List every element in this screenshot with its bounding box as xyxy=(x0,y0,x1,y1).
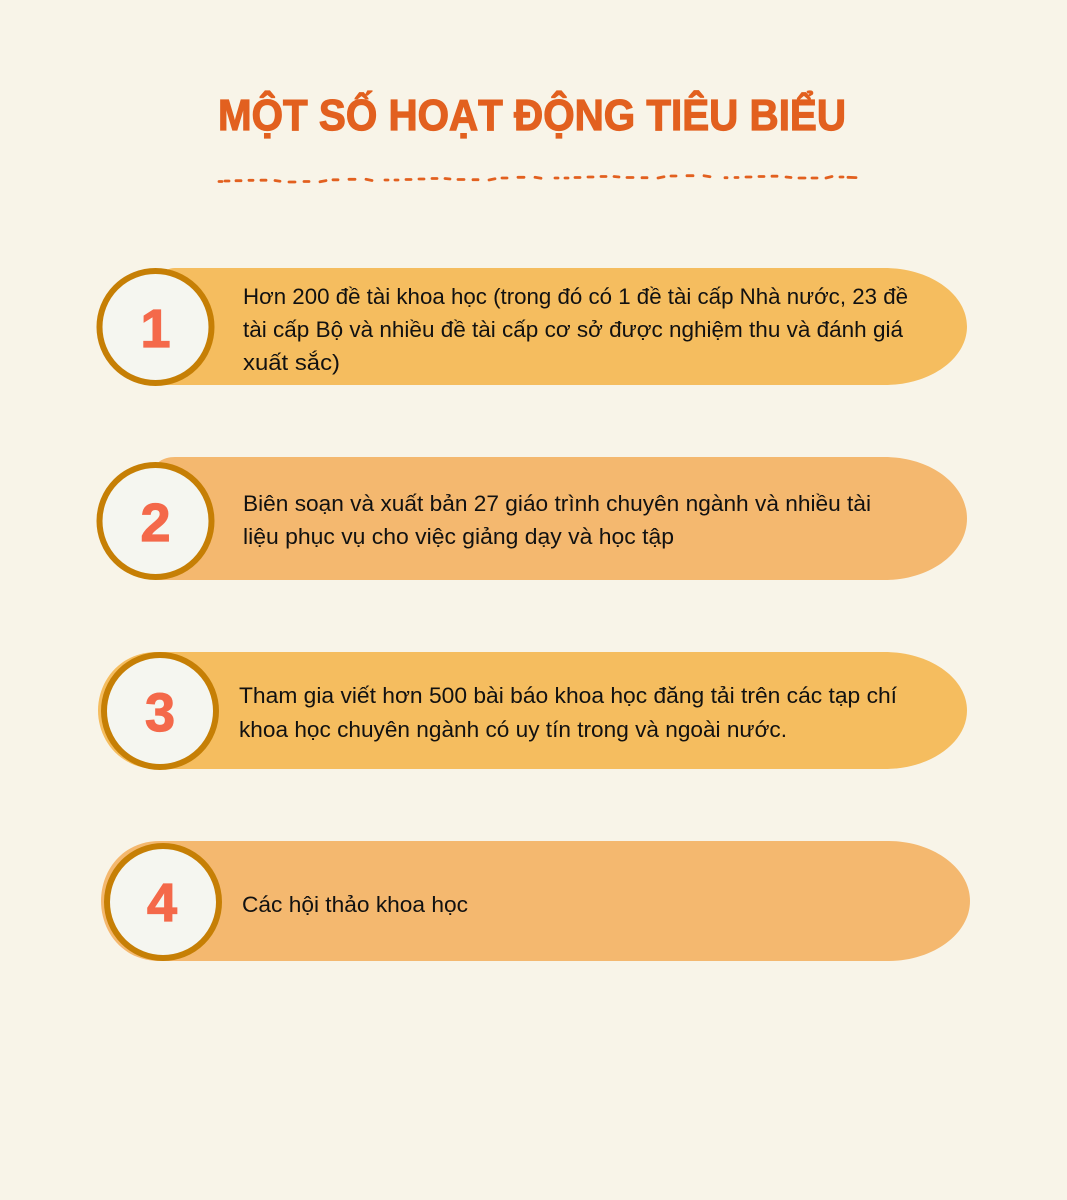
item 3 badge: 3 xyxy=(145,683,175,743)
title: MỘT SỐ HOẠT ĐỘNG TIÊU BIỂU xyxy=(218,89,846,140)
item 1 xyxy=(100,268,967,385)
item 3 text: Tham gia viết hơn 500 bài báo khoa học đăng tải trên các tạp chí xyxy=(239,683,897,708)
item 3 xyxy=(98,652,967,769)
item 3 text: khoa học chuyên ngành có uy tín trong và ngoài nước. xyxy=(239,717,787,742)
item 1 pill xyxy=(154,268,967,385)
item 2 badge: 2 xyxy=(140,493,171,553)
item 4 badge xyxy=(107,846,219,958)
item 3 text xyxy=(239,683,897,742)
item 2 badge xyxy=(100,465,212,577)
item 1 badge: 1 xyxy=(140,299,171,359)
item 2 pill xyxy=(154,457,967,580)
item 2 text: Biên soạn và xuất bản 27 giáo trình chuyên ngành và nhiều tài xyxy=(243,491,871,516)
item 1 text: Hơn 200 đề tài khoa học (trong đó có 1 đề tài cấp Nhà nước, 23 đề xyxy=(243,284,908,309)
item 4 pill xyxy=(101,841,970,961)
item 1 text xyxy=(243,284,908,375)
item 4 badge: 4 xyxy=(147,873,177,933)
item 1 text: tài cấp Bộ và nhiều đề tài cấp cơ sở được nghiệm thu và đánh giá xyxy=(243,317,904,342)
item 2 xyxy=(100,457,967,580)
item 1 text: xuất sắc) xyxy=(243,350,340,375)
item 3 badge xyxy=(104,655,216,767)
item 4 xyxy=(101,841,970,961)
item 2 text: liệu phục vụ cho việc giảng dạy và học tập xyxy=(243,524,674,549)
item 1 badge xyxy=(100,271,212,383)
dashed underline xyxy=(219,176,856,182)
item 3 pill xyxy=(98,652,967,769)
item 2 text xyxy=(243,491,871,549)
item 4 text: Các hội thảo khoa học xyxy=(242,892,468,917)
